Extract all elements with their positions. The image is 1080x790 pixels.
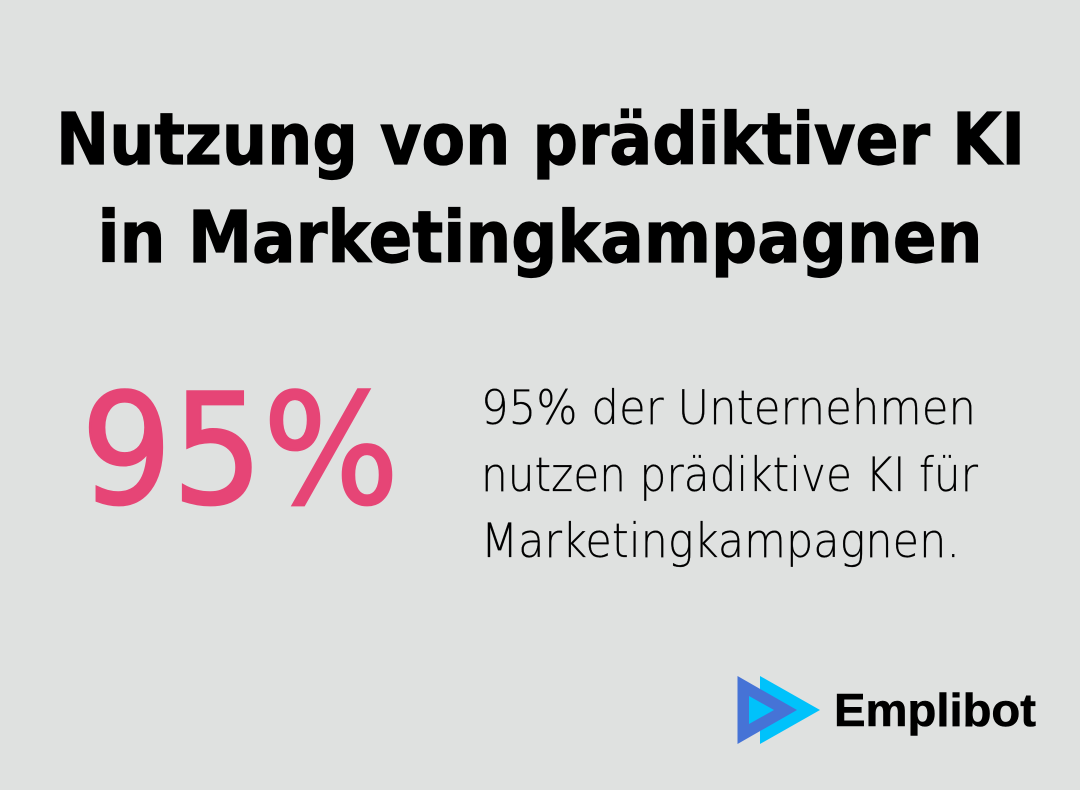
description text [481, 381, 979, 569]
icon: play triangles [738, 676, 820, 744]
wordmark: Emplibot [834, 684, 1036, 736]
big statistic: 95%: 95% [81, 362, 399, 540]
description text: Marketingkampagnen. [481, 514, 960, 569]
title: in Marketingkampagnen [98, 196, 982, 279]
description text: nutzen prädiktive KI für [481, 448, 979, 503]
description text: 95% der Unternehmen [481, 381, 976, 436]
title [56, 98, 1025, 279]
logo: Emplibot [738, 676, 1036, 744]
